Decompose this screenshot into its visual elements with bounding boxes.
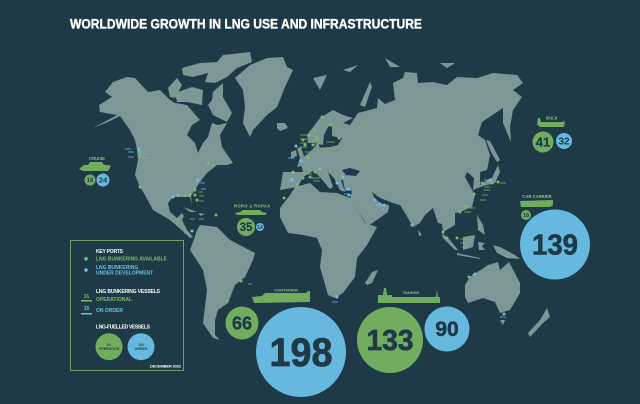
- car carrier in operation: 18: [523, 213, 529, 219]
- world map: [93, 52, 550, 340]
- New Zealand: [528, 308, 550, 337]
- cruise on order: 24: [99, 176, 108, 184]
- container label: CONTAINER: [274, 288, 298, 292]
- roro ship icon: [235, 210, 267, 215]
- Eurasia: [280, 72, 523, 232]
- Iceland: [277, 123, 288, 131]
- legend: date: DECEMBER 2022: [150, 364, 182, 368]
- roro on order: 14: [257, 225, 263, 231]
- legend: fuelled vessels heading: LNG-FUELLED VESSELS: [96, 324, 151, 330]
- bulk on order: 32: [558, 136, 570, 148]
- container ship icon: [252, 291, 310, 303]
- legend: operational count: 31: [84, 294, 89, 300]
- tanker label: TANKER: [403, 290, 419, 295]
- cruise ship icon: [79, 162, 111, 171]
- Arctic islands: [168, 52, 252, 122]
- bulk in operation: 41: [536, 134, 550, 150]
- South America: [190, 225, 255, 340]
- legend: under development label: LNG BUNKERING: [96, 265, 138, 271]
- container group: [226, 288, 346, 397]
- car carrier ship icon: [520, 200, 553, 207]
- container on order: 198: [270, 331, 332, 375]
- bulk ship icon: [537, 118, 565, 127]
- Greenland: [235, 57, 293, 137]
- legend: in operation circle: IN: [107, 343, 111, 347]
- legend: on order count: 15: [84, 306, 89, 312]
- legend: in operation circle: OPERATION: [99, 347, 120, 351]
- New Guinea: [493, 245, 520, 259]
- legend: operational label: OPERATIONAL: [96, 297, 132, 303]
- tanker in operation: 133: [366, 325, 414, 357]
- legend: under development marker: [84, 268, 88, 272]
- cruise label: CRUISE: [89, 156, 105, 161]
- legend: available marker: [84, 257, 88, 261]
- Madagascar: [365, 270, 378, 285]
- roro group: [234, 204, 270, 236]
- British Isles: [291, 147, 306, 167]
- car carrier on order: 139: [532, 230, 578, 262]
- port labels: available: [143, 135, 506, 284]
- seas cut from the map: [342, 168, 360, 176]
- legend: on order circle: ORDER: [135, 347, 148, 351]
- roro in operation: 35: [240, 222, 253, 234]
- ports: bunkering available: [140, 117, 498, 301]
- legend: in operation circle: [96, 333, 122, 360]
- cruise in operation: 18: [87, 178, 94, 184]
- tanker group: [357, 288, 470, 373]
- Sakhalin and Japan: [478, 140, 500, 188]
- South East Asia: [418, 215, 485, 259]
- legend panel: [70, 240, 184, 370]
- legend: on order label: ON ORDER: [96, 308, 123, 314]
- Australia: [465, 262, 520, 325]
- roro label: RORO & ROPAX: [234, 204, 270, 208]
- legend: available label: LNG BUNKERING AVAILABLE: [96, 256, 168, 262]
- legend: on order circle: ON: [138, 343, 144, 347]
- legend: on order circle: [128, 333, 154, 360]
- Svalbard and Russian Arctic: [313, 58, 455, 107]
- cruise group: [79, 156, 111, 186]
- legend: operational vessel: [81, 300, 92, 302]
- legend: key ports heading: KEY PORTS: [96, 249, 124, 255]
- ports: under development: [139, 146, 504, 314]
- legend: bunkering vessels heading: LNG BUNKERING VESSELS: [96, 289, 161, 295]
- title: WORLDWIDE GROWTH IN LNG USE AND INFRASTRUCTURE: [70, 16, 422, 32]
- tanker ship icon: [378, 288, 440, 303]
- legend: on order vessel: [81, 313, 92, 314]
- Caribbean: [183, 207, 205, 216]
- bulk group: [532, 116, 572, 152]
- North America: [93, 77, 233, 238]
- tanker on order: 90: [435, 318, 459, 341]
- bulk label: BULK: [546, 116, 558, 120]
- car carrier group: [520, 194, 590, 280]
- car carrier label: CAR CARRIER: [522, 194, 552, 199]
- container in operation: 66: [232, 314, 252, 334]
- legend: under development label: UNDER DEVELOPMENT: [96, 270, 153, 276]
- port labels: development: [125, 149, 506, 317]
- Africa: [280, 183, 377, 298]
